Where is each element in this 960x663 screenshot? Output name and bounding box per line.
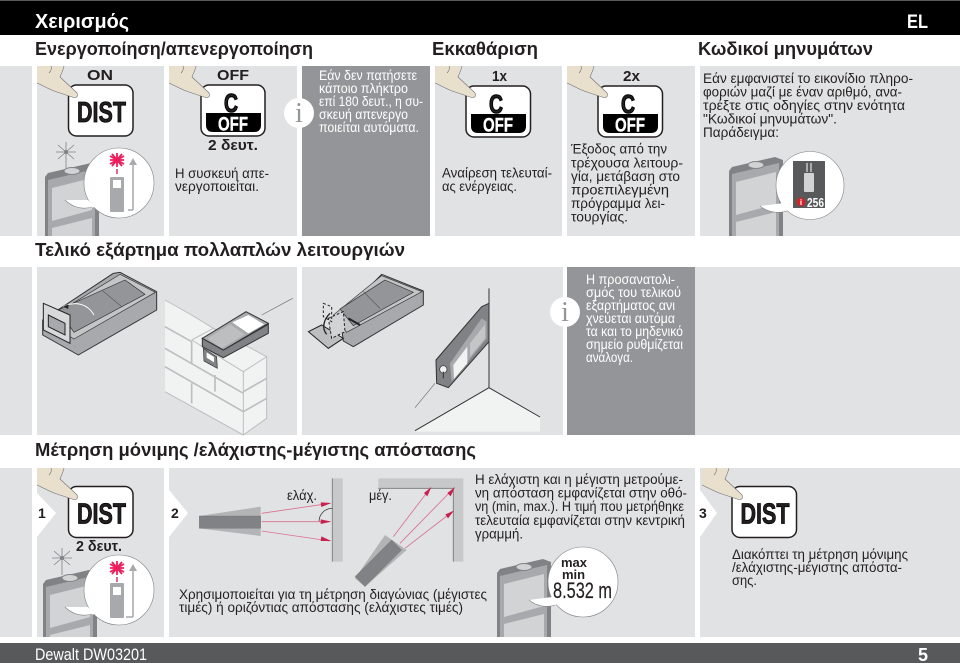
icon: finger <box>702 468 743 500</box>
panel: clear 2x <box>567 66 695 236</box>
panel: ON <box>36 66 164 236</box>
clear description: Αναίρεση τελευταί- <box>442 166 552 180</box>
message codes description: Παράδειγμα: <box>703 125 779 140</box>
heading: multifunction end piece: Τελικό εξάρτημα πολλαπλών λειτουργιών <box>35 240 405 261</box>
icon: finger <box>435 66 476 98</box>
step chevron 2: 2 <box>171 505 179 521</box>
icon: device with laser bubble <box>43 548 154 637</box>
margin strip row 2 <box>0 267 32 435</box>
min max description: τελευταία εμφανίζεται στην κεντρική <box>475 513 685 528</box>
margin strip row 3 <box>0 468 32 637</box>
min max description <box>475 472 687 542</box>
2 seconds label: 2 δευτ. <box>208 137 258 154</box>
icon: finger <box>169 66 210 98</box>
step chevron 1: 1 <box>38 505 46 521</box>
min max description: νη απόσταση εμφανίζεται στην οθό- <box>475 486 687 500</box>
2x label: 2x <box>623 68 641 85</box>
heading: clear: Εκκαθάριση <box>432 39 538 59</box>
panel: end piece note: Η προσανατολι- <box>586 272 675 287</box>
icon: device with error 256 <box>729 151 844 236</box>
exit description <box>570 142 683 224</box>
icon: info <box>550 297 580 328</box>
panel: end piece note: σμός του τελικού <box>586 285 681 300</box>
icon: device with error 256: i <box>800 198 802 207</box>
off description <box>175 166 269 194</box>
usage description: τιμές) ή οριζόντιας απόστασης (ελάχιστες τιμές) <box>179 600 463 615</box>
DIST button: DIST <box>77 498 126 530</box>
panel: step 1 <box>36 468 164 637</box>
icon: info: i <box>561 297 569 328</box>
icon: info <box>284 98 314 129</box>
stop description: /ελάχιστης-μέγιστης απόστα- <box>732 560 902 575</box>
empty panel right <box>695 267 960 435</box>
C OFF button: C <box>224 88 238 118</box>
exit description: τουργίας. <box>571 210 628 224</box>
panel: step 2 <box>169 468 695 637</box>
1x label: 1x <box>492 68 508 85</box>
DIST button <box>68 486 133 538</box>
off description: νεργοποιείται. <box>175 179 259 194</box>
C OFF button: OFF <box>218 114 248 136</box>
message codes description: τρέξτε στις οδηγίες στην ενότητα <box>703 98 905 113</box>
panel: step 3 <box>699 468 960 637</box>
panel: end piece note: ανάλογα. <box>586 350 633 365</box>
clear description: ας ενέργειας. <box>442 179 517 194</box>
exit description: γία, μετάβαση στο <box>571 169 680 184</box>
C OFF button: OFF <box>615 116 645 136</box>
min max description: γραμμή. <box>475 526 523 542</box>
min label: ελάχ. <box>287 488 317 503</box>
step chevron 3: 3 <box>699 505 707 521</box>
icon: device with min max display <box>497 546 618 637</box>
icon: device with min max display: min <box>562 567 585 582</box>
C OFF button <box>201 85 265 136</box>
top title bar <box>0 0 960 35</box>
DIST button: DIST <box>740 498 790 530</box>
icon: finger <box>567 66 608 98</box>
icon: device with laser bubble <box>45 142 154 236</box>
step chevron 2 <box>169 490 188 537</box>
off description: Η συσκευή απε- <box>175 166 269 181</box>
icon: finger <box>37 66 78 98</box>
stop description: σης. <box>732 573 757 588</box>
2 seconds label: 2 δευτ. <box>76 538 122 555</box>
panel: auto-off note: ποιείται αυτόματα. <box>319 120 419 135</box>
panel: end piece note <box>567 267 695 435</box>
icon: device with error 256: 256 <box>807 195 824 210</box>
heading: permanent measurement: Μέτρηση μόνιμης /ελάχιστης-μέγιστης απόστασης <box>35 440 476 460</box>
C OFF button <box>598 86 662 137</box>
panel: end piece note: τα και το μηδενικό <box>586 324 683 339</box>
device with fold-out end piece <box>43 272 157 355</box>
DIST button <box>68 85 133 136</box>
language code: EL <box>907 12 928 33</box>
C OFF button <box>466 86 530 137</box>
device on brick wall <box>165 298 293 435</box>
panel: auto-off note: Εάν δεν πατήσετε <box>319 68 417 83</box>
heading: message codes: Κωδικοί μηνυμάτων <box>698 39 873 59</box>
usage description: Χρησιμοποιείται για τη μέτρηση διαγώνιας (μέγιστες <box>179 587 487 602</box>
message codes description: φοριών μαζί με έναν αριθμό, ανα- <box>703 84 902 100</box>
panel: auto-off note <box>302 66 430 236</box>
exit description: τρέχουσα λειτουρ- <box>571 156 683 170</box>
stop description <box>732 547 908 588</box>
min max description: νη (min, max.). Η τιμή που μετρήθηκε <box>475 499 684 514</box>
exit description: Έξοδος από την <box>570 142 667 156</box>
icon: finger <box>37 468 78 500</box>
panel: auto-off note: κάποιο πλήκτρο <box>319 81 408 96</box>
DIST button: DIST <box>77 97 126 129</box>
message codes description: Εάν εμφανιστεί το εικονίδιο πληρο- <box>703 71 913 86</box>
panel: end piece note: σημείο ρυθμίζεται <box>586 337 683 352</box>
footer bar <box>0 643 960 663</box>
DIST button <box>732 486 796 538</box>
C OFF button: OFF <box>483 116 513 136</box>
panel: clear 1x <box>435 66 562 236</box>
exit description: πρόγραμμα λει- <box>571 196 665 211</box>
step chevron 3 <box>699 490 717 537</box>
panel: auto-off note: επί 180 δευτ., η συ- <box>319 94 423 109</box>
max label: μέγ. <box>369 488 392 503</box>
diagram: minimum and maximum distance <box>199 478 463 587</box>
C OFF button: C <box>621 89 635 119</box>
panel: end piece device and bricks <box>37 267 297 435</box>
icon: device with min max display: 8.532 m <box>553 578 612 603</box>
usage description <box>179 587 487 615</box>
icon: device with min max display: max <box>561 555 588 570</box>
stop description: Διακόπτει τη μέτρηση μόνιμης <box>732 547 908 562</box>
margin strip row 1 <box>0 66 32 236</box>
device with rotating end piece <box>308 274 423 348</box>
panel: auto-off note: σκευή απενεργο <box>319 107 408 122</box>
panel: end piece note: χνεύεται αυτόμα <box>586 311 675 326</box>
OFF label: OFF <box>217 67 249 84</box>
step chevron 1 <box>37 493 56 537</box>
panel: OFF <box>169 66 297 236</box>
panel: end piece note: εξαρτήματος ανι <box>586 298 675 313</box>
message codes description: "Κωδικοί μηνυμάτων". <box>703 112 837 126</box>
icon: info: i <box>295 98 303 129</box>
min max description: Η ελάχιστη και η μέγιστη μετρούμε- <box>475 472 683 487</box>
panel: end piece rotation and corner <box>302 267 563 435</box>
device mounted in wall corner <box>415 288 540 432</box>
heading: on/off: Ενεργοποίηση/απενεργοποίηση <box>35 39 313 59</box>
message codes description <box>703 71 913 140</box>
C OFF button: C <box>489 89 503 119</box>
page title: Χειρισμός <box>35 11 129 33</box>
panel: message codes <box>700 66 960 236</box>
clear description <box>442 166 552 194</box>
exit description: προεπιλεγμένη <box>571 182 669 198</box>
ON label: ON <box>87 67 113 84</box>
